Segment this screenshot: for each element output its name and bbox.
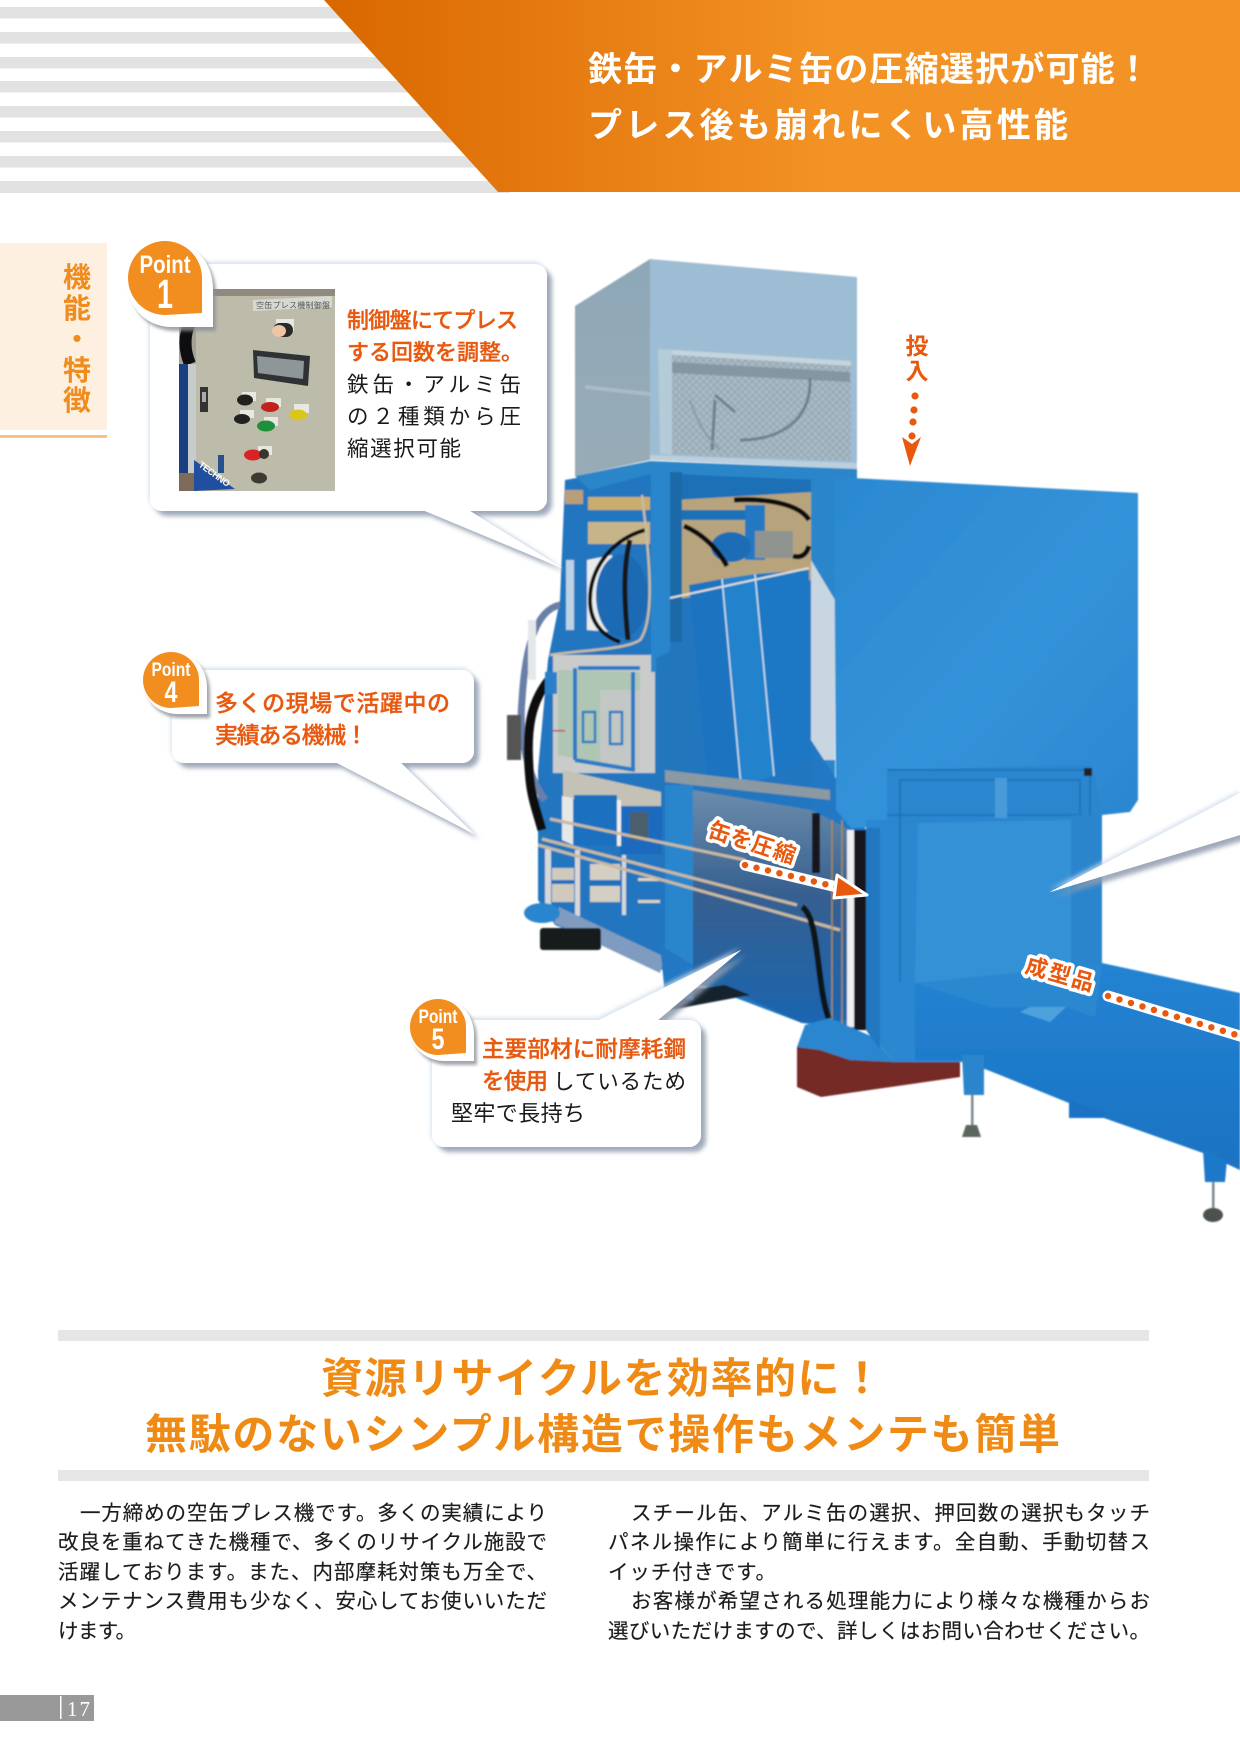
center column	[651, 472, 703, 786]
body text left column: けます。	[58, 1620, 136, 1643]
rods	[538, 819, 840, 930]
label: 成型品 dotted line	[1023, 953, 1240, 1036]
callout 5 text	[451, 1037, 686, 1126]
page number: 17	[67, 1697, 90, 1721]
callout 1 text: 鉄缶・アルミ缶	[347, 373, 521, 397]
side tab: 機能・特徴: 能	[63, 293, 91, 324]
header stripes	[0, 7, 510, 193]
body text right column: 選びいただけますので、詳しくはお問い合わせください。	[608, 1620, 1150, 1643]
body text right column	[608, 1502, 1150, 1643]
callout 1 text: 縮選択可能	[347, 437, 461, 461]
control panel photo: 空缶プレス機制御盤	[256, 300, 330, 310]
panel: point 5	[410, 950, 741, 1147]
header title: 鉄缶・アルミ缶の圧縮選択が可能！	[588, 50, 1150, 89]
hoses left	[507, 605, 560, 830]
callout 1 text: 制御盤にてプレス	[347, 308, 518, 333]
label: 投入 arrow: 入	[906, 358, 928, 384]
badge: Point 5: 5	[432, 1023, 444, 1056]
lower dark panel	[660, 770, 850, 1023]
body text right column: スチール缶、アルミ缶の選択、押回数の選択もタッチ	[631, 1502, 1150, 1525]
panel: point 1	[127, 241, 562, 568]
page number	[0, 1695, 94, 1721]
badge: Point 5	[410, 999, 474, 1061]
callout box 1	[150, 264, 562, 568]
callout box 5	[432, 950, 741, 1147]
body text left column	[58, 1502, 547, 1643]
badge: Point 1: 1	[157, 271, 173, 317]
adjuster feet	[962, 1055, 1227, 1222]
output tray	[915, 963, 1240, 1170]
upper left mechanism	[550, 490, 650, 655]
header title	[588, 50, 1150, 145]
callout tail: off-page point	[1050, 793, 1240, 892]
callout 5 text: を使用	[482, 1069, 548, 1094]
body text left column: 活躍しております。また、内部摩耗対策も万全で、	[58, 1561, 547, 1584]
body text left column: 改良を重ねてきた機種で、多くのリサイクル施設で	[58, 1531, 547, 1554]
blue band under hopper	[575, 461, 857, 490]
body text right column: パネル操作により簡単に行えます。全自動、手動切替ス	[608, 1531, 1150, 1554]
side tab: 機能・特徴: ・	[63, 324, 91, 355]
label: 缶を圧縮 arrow: 缶を圧縮	[705, 817, 799, 869]
lower left frame	[524, 770, 665, 973]
callout 4 text	[215, 690, 450, 748]
hopper	[575, 259, 857, 476]
label: 成型品 dotted line: 成型品	[1023, 953, 1097, 996]
section heading: 資源リサイクルを効率的に！	[321, 1355, 883, 1402]
side tab: 機能・特徴: 徴	[63, 385, 91, 416]
slanted chute fins	[670, 480, 866, 830]
callout 5 text: 主要部材に耐摩耗鋼	[482, 1037, 686, 1062]
badge: Point 4	[143, 652, 207, 714]
section heading: 無駄のないシンプル構造で操作もメンテも簡単	[145, 1411, 1060, 1458]
body text right column: イッチ付きです。	[608, 1561, 776, 1584]
badge: Point 1	[127, 241, 213, 327]
badge: Point 4: Point	[152, 660, 191, 681]
machine backplate	[538, 465, 866, 1030]
side tab: 機能・特徴	[0, 243, 107, 438]
side tab: 機能・特徴: 特	[63, 355, 91, 386]
panel: point 4	[143, 652, 474, 834]
header title: プレス後も崩れにくい高性能	[588, 107, 1068, 145]
badge: Point 5: Point	[418, 1007, 458, 1028]
base blue foot	[797, 1018, 894, 1062]
callout 1 text	[347, 308, 523, 461]
side tab: 機能・特徴: 機	[63, 262, 91, 293]
label: 投入 arrow: 投	[906, 333, 928, 359]
body text right column: お客様が希望される処理能力により様々な機種からお	[631, 1590, 1150, 1613]
callout 5 text: 堅牢で長持ち	[451, 1101, 585, 1126]
label: 投入 arrow	[902, 333, 928, 466]
machine photo illustration	[507, 259, 1240, 1222]
callout box 4	[172, 670, 474, 834]
callout 5 text: しているため	[553, 1070, 686, 1094]
callout 4 text: 実績ある機械！	[215, 722, 368, 748]
red base	[797, 1040, 960, 1097]
control panel photo: TECHNO	[197, 460, 232, 489]
large blue box	[834, 477, 1138, 828]
upper right of column: hoses and cylinder	[670, 474, 812, 600]
control box	[545, 655, 655, 773]
lower front body	[866, 765, 1102, 1062]
callout 4 text: 多くの現場で活躍中の	[215, 690, 450, 716]
header banner	[324, 0, 1240, 192]
body text left column: メンテナンス費用も少なく、安心してお使いいただ	[58, 1590, 547, 1613]
badge: Point 1: Point	[140, 251, 191, 279]
label: 缶を圧縮 arrow	[705, 817, 867, 898]
hydraulic cylinders	[802, 813, 866, 1030]
badge: Point 4: 4	[164, 676, 178, 709]
callout 1 text: する回数を調整。	[347, 340, 523, 365]
control panel photo	[179, 289, 335, 491]
callout 1 text: の２種類から圧	[347, 405, 521, 429]
section heading	[58, 1330, 1149, 1481]
body text left column: 一方締めの空缶プレス機です。多くの実績により	[80, 1502, 547, 1525]
